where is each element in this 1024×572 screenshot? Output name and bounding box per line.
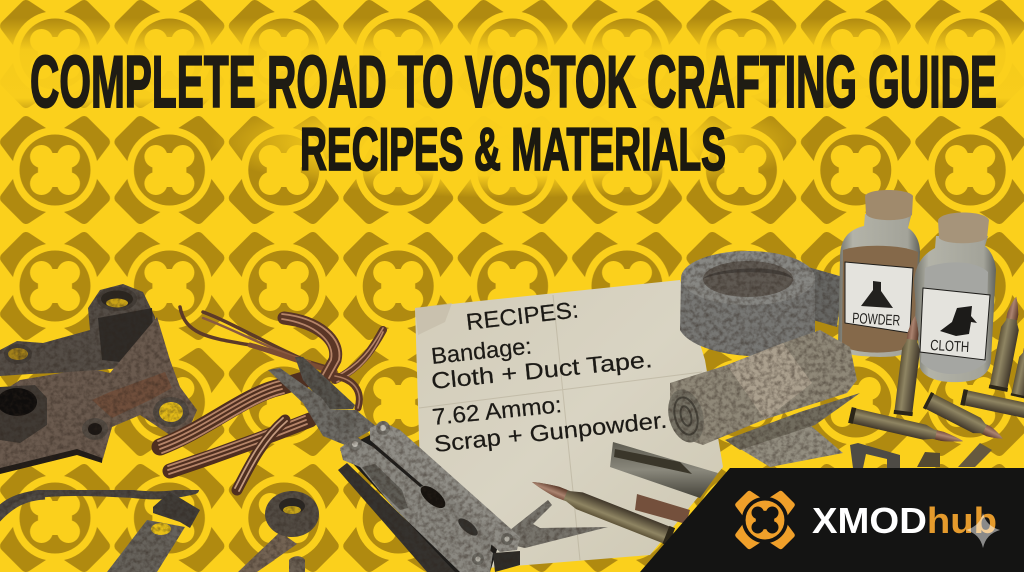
icon: rusty lower bracket — [0, 317, 197, 474]
icon: flask — [861, 281, 893, 308]
bottle glass — [914, 236, 996, 382]
lower jaw and head — [268, 368, 377, 445]
cloth contents — [921, 262, 988, 374]
icon: copper wires — [158, 307, 383, 491]
text: recipes heading: RECIPES: — [465, 296, 580, 335]
icon: powder bottle — [838, 190, 920, 357]
subtitle: RECIPES & MATERIALS — [300, 116, 726, 183]
icon: cloth — [940, 306, 977, 336]
icon: small metal wrench — [850, 443, 900, 468]
logo mark — [738, 494, 792, 546]
icon: duct tape roll — [680, 251, 843, 356]
icon: eye bolt — [238, 491, 319, 572]
icon: multitool pliers — [268, 357, 520, 572]
label text: CLOTH — [930, 337, 970, 356]
sparkle — [966, 513, 1000, 548]
powder contents — [842, 246, 918, 353]
text: ammo: 7.62 Ammo: — [431, 391, 563, 430]
text: ammo recipe: Scrap + Gunpowder. — [433, 407, 668, 457]
text: bandage recipe: Cloth + Duct Tape. — [430, 346, 653, 394]
cork — [938, 212, 989, 243]
upper jaw — [295, 357, 355, 409]
upper handle — [370, 422, 520, 552]
logo panel — [640, 468, 1024, 572]
icon: cloth bottle — [914, 212, 996, 382]
lower handle — [340, 437, 493, 572]
bottle glass — [838, 214, 920, 357]
icon: folding blade of multitool — [510, 500, 608, 548]
paper note with recipes — [415, 280, 723, 572]
icon: rusty upper bracket — [0, 284, 155, 376]
cork — [865, 190, 913, 220]
icon: metal rod and clamp — [0, 490, 200, 572]
icon: ammo rounds — [529, 295, 1024, 546]
icon: rolled bandage — [663, 330, 857, 446]
label — [920, 288, 990, 360]
icon: cloth scrap — [725, 393, 860, 467]
text: bandage: Bandage: — [430, 333, 533, 369]
logo wordmark: XMODhub — [812, 500, 997, 541]
label text: POWDER — [852, 310, 901, 330]
label — [845, 262, 913, 333]
